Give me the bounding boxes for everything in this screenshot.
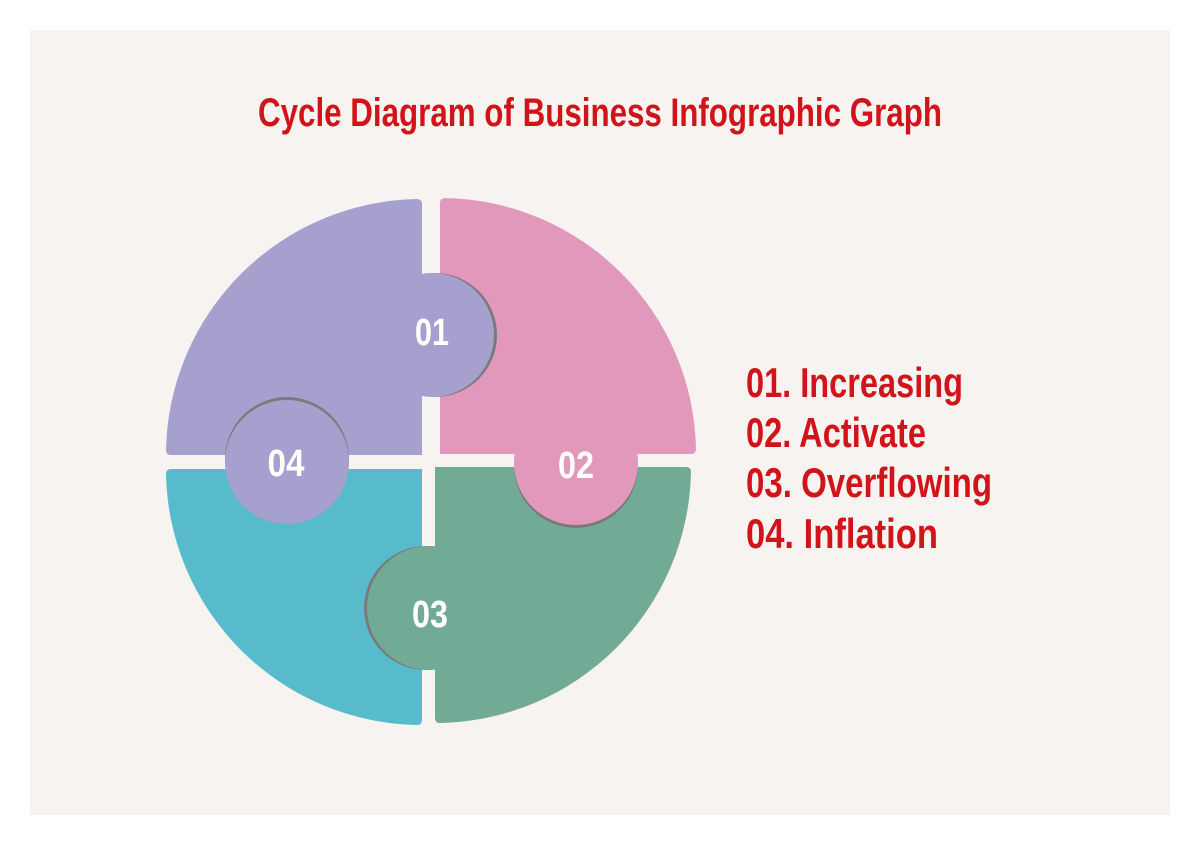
legend: 02. Activate [746,409,926,456]
tab 01: 01 [415,312,449,354]
tab 01 [370,273,497,397]
legend [746,359,992,557]
cycle diagram [166,198,696,725]
tab 04: 04 [268,443,304,485]
legend: 01. Increasing [746,359,963,406]
piece 03 [435,467,691,723]
title: Cycle Diagram of Business Infographic Graph [258,91,942,135]
tab 03 [364,546,491,670]
tab 03: 03 [412,594,448,636]
tab 04 [225,397,349,524]
piece 01 [166,199,422,455]
legend: 03. Overflowing [746,459,992,506]
piece 04 [166,469,422,725]
tab 02 [514,401,638,528]
legend: 04. Inflation [746,510,938,557]
tab 02: 02 [558,445,594,487]
piece 02 [440,198,696,454]
